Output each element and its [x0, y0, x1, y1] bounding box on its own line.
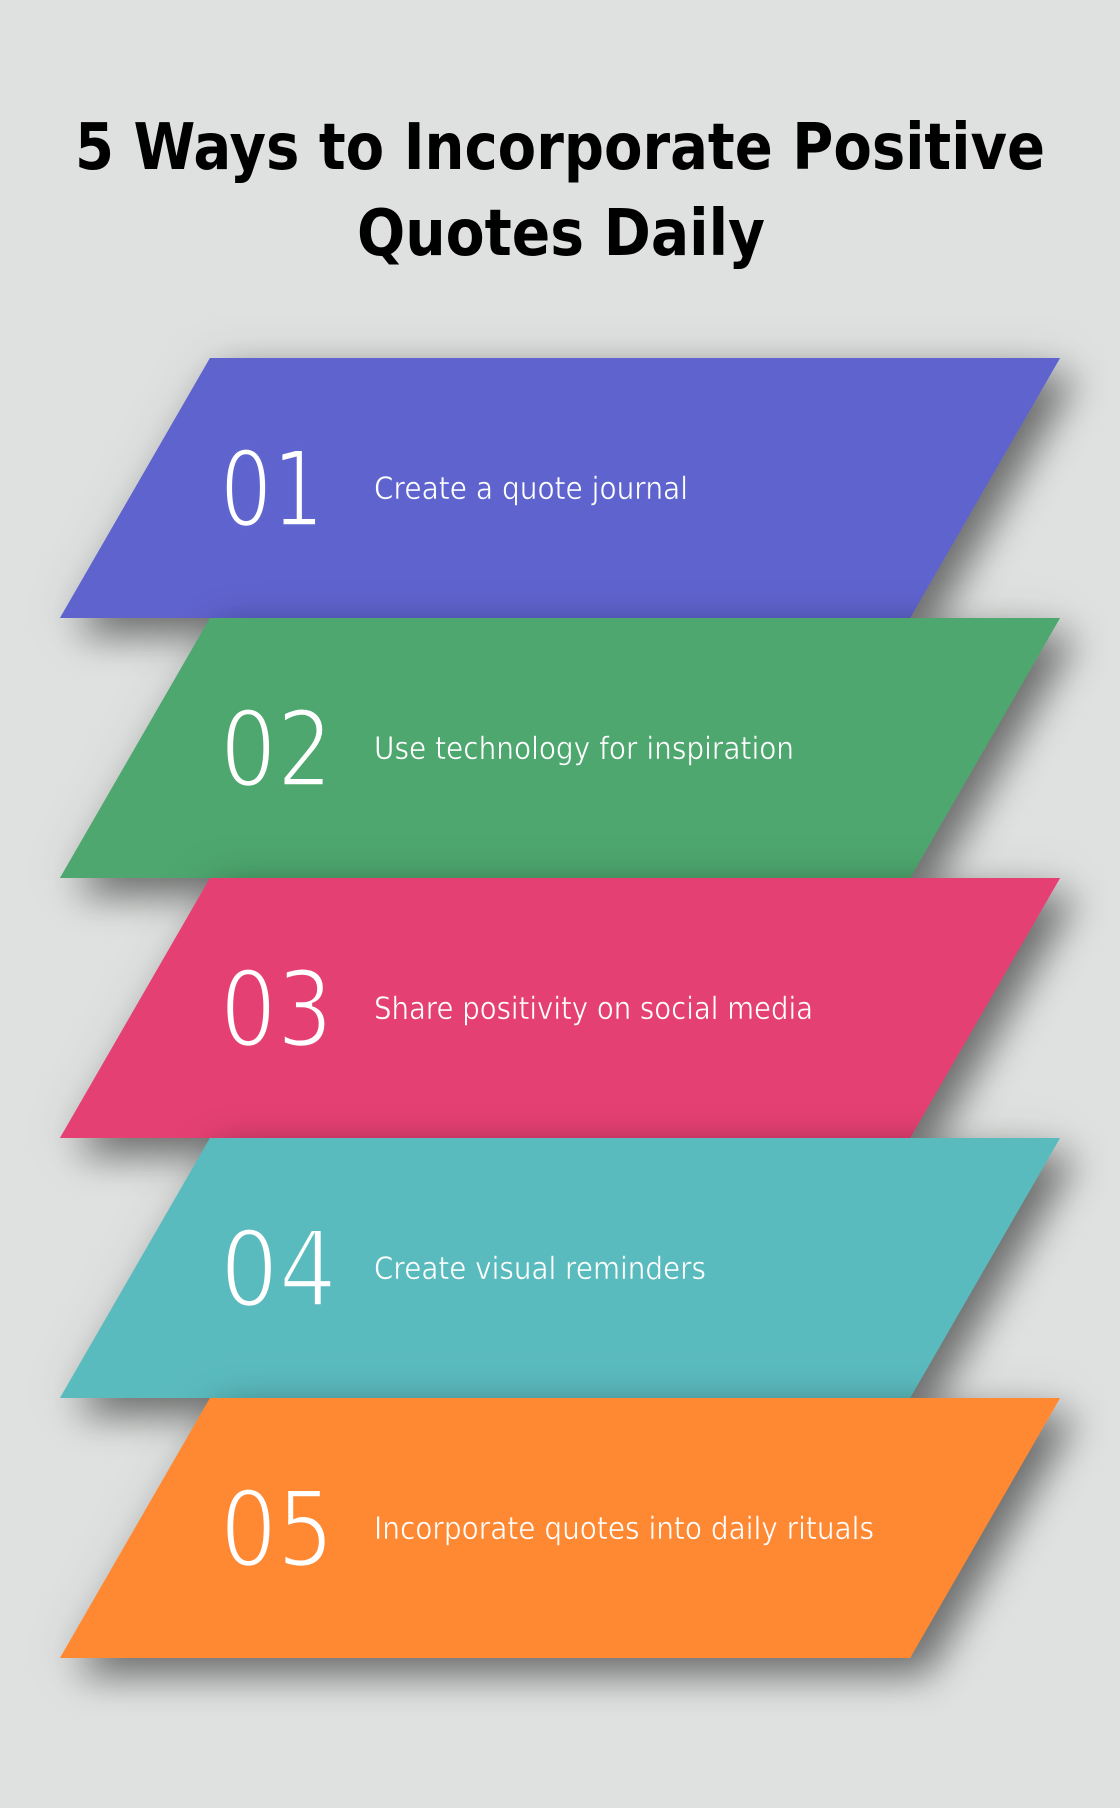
label: step 01: Create a quote journal [374, 471, 688, 507]
shape: pink parallelogram [60, 878, 1060, 1138]
number 05: 05 [220, 1469, 334, 1591]
panel: step 03 [60, 878, 1060, 1138]
shape: blue parallelogram [60, 358, 1060, 618]
panel: step 04 [60, 1138, 1060, 1398]
shape: teal parallelogram [60, 1138, 1060, 1398]
panel: step 02 [60, 618, 1060, 878]
shape: orange parallelogram [60, 1398, 1060, 1658]
label: step 05: Incorporate quotes into daily rituals [374, 1511, 874, 1547]
number 04: 04 [220, 1209, 337, 1331]
panel: step 01 [60, 358, 1060, 618]
shape: green parallelogram [60, 618, 1060, 878]
title [75, 111, 1045, 271]
label: step 02: Use technology for inspiration [374, 731, 794, 767]
number 03: 03 [220, 949, 333, 1071]
label: step 03: Share positivity on social media [374, 991, 813, 1027]
number 02: 02 [220, 689, 333, 811]
label: step 04: Create visual reminders [374, 1251, 706, 1287]
number 01: 01 [220, 429, 324, 551]
title: Quotes Daily [357, 197, 765, 271]
panel: step 05 [60, 1398, 1060, 1658]
